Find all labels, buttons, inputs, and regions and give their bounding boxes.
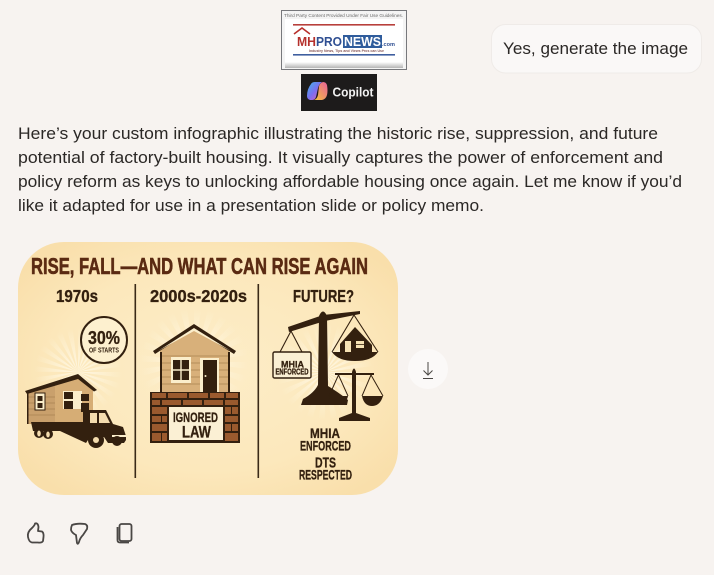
text block: MHIA enforced: ENFORCED xyxy=(300,438,351,454)
text block: response paragraph: potential of factory-built housing. It visually captures the power of enforcement and xyxy=(18,149,663,167)
text block: response paragraph: like it adapted for use in a presentation slide or policy memo. xyxy=(18,197,484,215)
icon: small scale xyxy=(329,368,383,421)
heading: 2000s-2020s: 2000s-2020s xyxy=(150,286,247,306)
logo: MHProNews: PRO xyxy=(316,35,342,49)
icon: large scale xyxy=(273,311,378,405)
logo: MHProNews: Industry News, Tips and Views Pros can Use xyxy=(309,49,384,53)
icon: house on truck xyxy=(25,374,126,448)
heading: Future: FUTURE? xyxy=(293,286,354,306)
logo: MHProNews: Third Party Content Provided Under Fair Use Guidelines. xyxy=(284,13,403,18)
sign: MHIA enforced: ENFORCED xyxy=(276,368,309,376)
sign: MHIA enforced: MHIA xyxy=(281,360,304,370)
text block: MHIA enforced: MHIA xyxy=(310,425,340,441)
badge: 30 percent of starts: 30% xyxy=(88,327,120,348)
text block: response paragraph: Here’s your custom infographic illustrating the historic rise, suppression, and future xyxy=(18,125,658,143)
icon: house on brick base xyxy=(150,324,240,443)
sign: ignored law: LAW xyxy=(182,424,211,442)
sign: ignored law xyxy=(169,407,223,442)
icon: download button xyxy=(408,349,448,389)
logo: MHProNews xyxy=(282,10,406,70)
icon: copy xyxy=(118,524,132,542)
text block: DTS respected: DTS xyxy=(315,454,336,472)
sun rays xyxy=(167,335,221,389)
panel: Future xyxy=(273,311,383,482)
logo: Copilot xyxy=(301,74,377,111)
text block: DTS respected: RESPECTED xyxy=(299,468,352,482)
panel: 2000s-2020s xyxy=(150,324,240,443)
logo: MHProNews: MH xyxy=(297,35,316,49)
text block: response paragraph: policy reform as keys to unlocking affordable housing once again. Let me know if you’d xyxy=(18,173,682,191)
logo: MHProNews: NEWS xyxy=(344,35,381,49)
user message bubble: Yes, generate the image xyxy=(503,39,688,58)
column divider right xyxy=(258,284,259,478)
title: RISE, FALL—AND WHAT CAN RISE AGAIN xyxy=(31,253,368,279)
text block: DTS respected xyxy=(299,454,352,482)
panel: infographic card xyxy=(18,242,398,495)
sun rays xyxy=(56,350,100,394)
panel: 1970s xyxy=(25,317,127,448)
text block: MHIA enforced xyxy=(300,425,351,454)
badge: 30 percent of starts: OF STARTS xyxy=(89,348,119,354)
logo: Copilot: Copilot xyxy=(332,84,374,100)
column divider left xyxy=(134,284,136,478)
sign: ignored law: IGNORED xyxy=(173,409,218,425)
sun rays xyxy=(301,348,349,396)
logo: MHProNews: .com xyxy=(382,42,395,48)
icon: thumbs up xyxy=(28,523,44,543)
icon: thumbs down xyxy=(71,524,87,544)
text block: response paragraph xyxy=(18,125,682,215)
icon: Copilot mark xyxy=(307,82,328,100)
heading: 1970s: 1970s xyxy=(56,286,98,306)
sign: MHIA enforced xyxy=(273,352,311,378)
badge: 30 percent of starts xyxy=(81,317,127,363)
icon: house in pan xyxy=(340,327,372,353)
user message bubble xyxy=(492,24,702,73)
